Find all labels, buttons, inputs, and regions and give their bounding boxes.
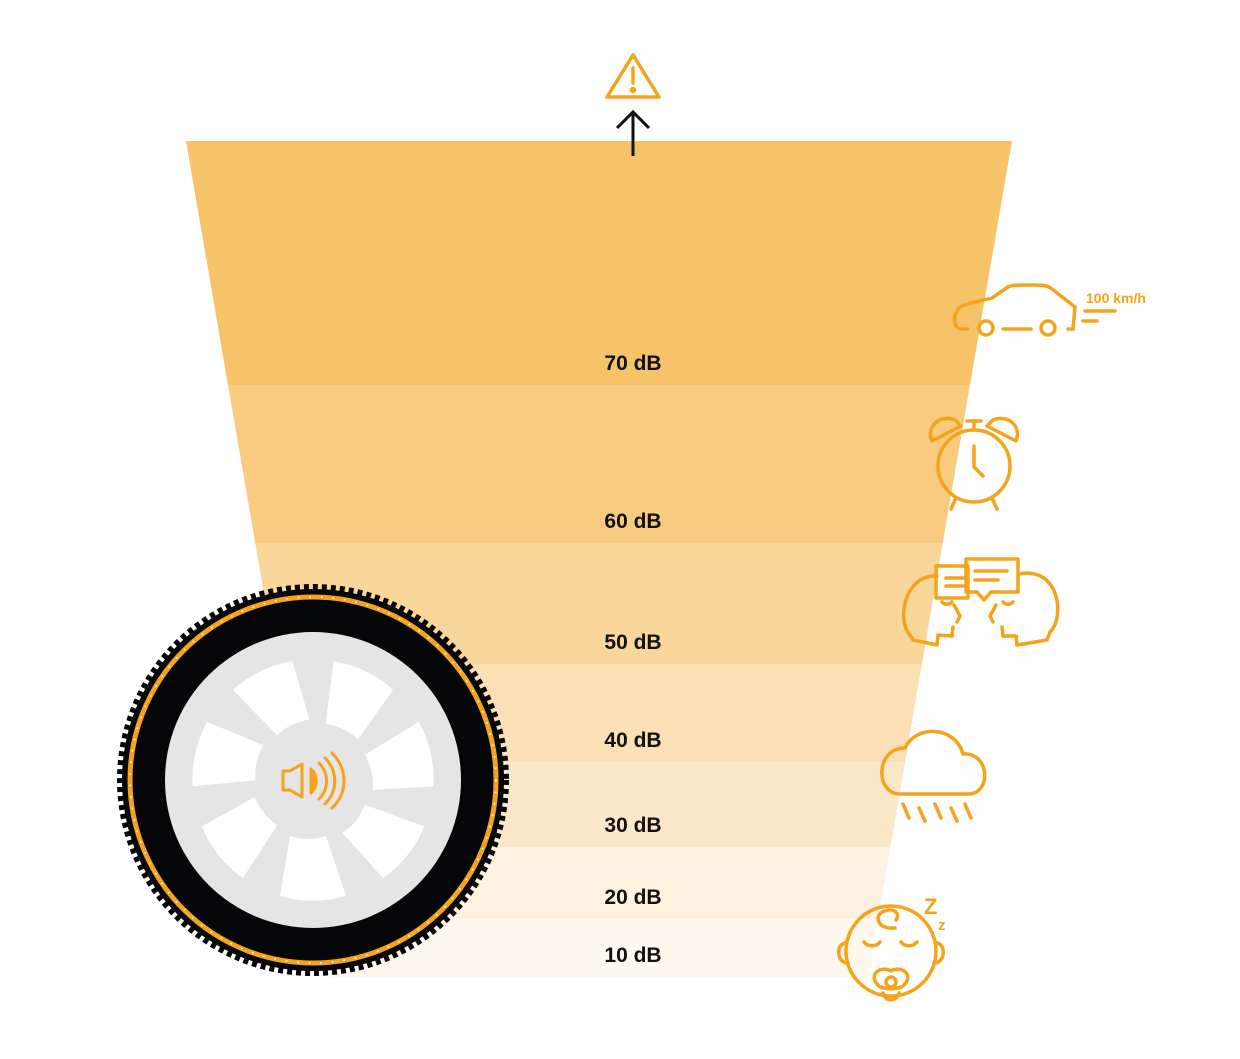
- icon: rain cloud: [882, 731, 985, 821]
- rim windows: [188, 657, 438, 901]
- icon: sleeping baby: [839, 906, 943, 1000]
- rim: [165, 632, 461, 928]
- dB labels: [604, 352, 662, 967]
- icon: car: [954, 285, 1115, 335]
- icon: alarm clock: [931, 418, 1017, 509]
- dB labels: 50 dB: [604, 631, 662, 654]
- dB labels: 40 dB: [604, 729, 662, 752]
- zzz: [924, 894, 946, 934]
- dB labels: 70 dB: [604, 352, 662, 375]
- band: 10 dB: [329, 919, 878, 977]
- icon: speaker: [283, 753, 344, 808]
- dB labels: 60 dB: [604, 510, 662, 533]
- band: 50 dB: [255, 543, 943, 664]
- icon: warning triangle: [607, 55, 659, 97]
- car speed label: 100 km/h: [1086, 290, 1146, 306]
- funnel chart: [186, 141, 1012, 977]
- zzz: Z: [924, 894, 937, 919]
- band: 30 dB: [492, 762, 905, 847]
- wheel: [120, 587, 506, 973]
- band: 40 dB: [464, 664, 922, 762]
- icon: two heads talking: [904, 559, 1058, 645]
- band: 70 dB: [186, 141, 1012, 385]
- dB labels: 30 dB: [604, 814, 662, 837]
- band: 60 dB: [228, 385, 970, 543]
- dB labels: 10 dB: [604, 944, 662, 967]
- dB labels: 20 dB: [604, 886, 662, 909]
- arrow up: [617, 112, 649, 156]
- band: 20 dB: [447, 847, 890, 919]
- tire: [122, 589, 504, 971]
- zzz: z: [938, 917, 946, 934]
